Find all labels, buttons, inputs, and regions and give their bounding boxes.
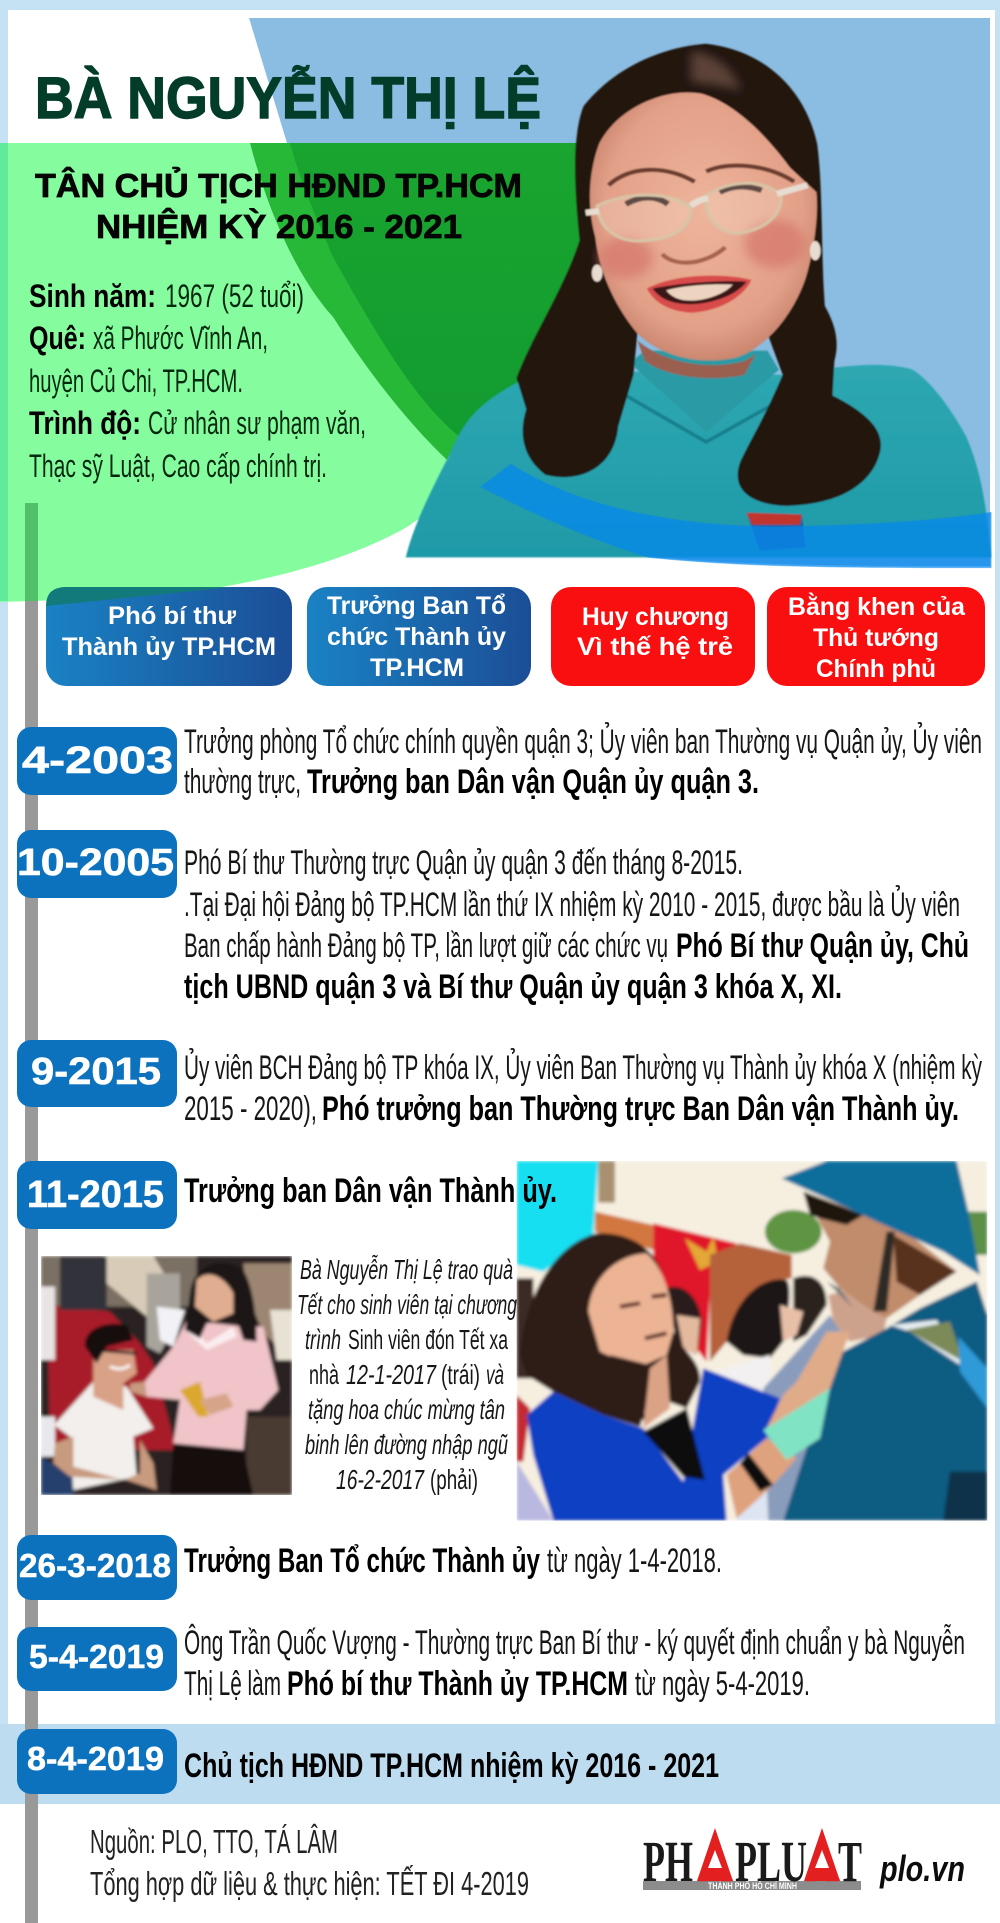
teeth xyxy=(666,284,733,301)
text block: personal information: Cử nhân sư phạm văn, xyxy=(148,405,366,441)
timeline entry: 8-4-2019: Chủ tịch HĐND TP.HCM nhiệm kỳ 2016 - 2021 xyxy=(184,1747,719,1785)
earrings xyxy=(592,241,821,282)
timeline entry: 8-4-2019 xyxy=(17,1729,719,1794)
timeline entry: 26-3-2018: từ ngày 1-4-2018. xyxy=(547,1542,722,1580)
text block: personal information xyxy=(29,278,366,484)
badge: Pho bi thu: Phó bí thư xyxy=(108,602,237,630)
glasses xyxy=(597,183,781,241)
logo: Phap Luat xyxy=(643,1828,862,1894)
hair xyxy=(517,44,881,506)
photo caption: và xyxy=(486,1359,504,1390)
blue wave xyxy=(480,464,991,568)
neck shadow xyxy=(637,340,756,378)
woman neck xyxy=(643,1355,670,1428)
timeline entry: 11-2015: 11-2015 xyxy=(27,1174,164,1216)
photo caption xyxy=(297,1254,517,1495)
photo: pinning badge on recruit xyxy=(517,1161,987,1521)
text block: personal information: Thạc sỹ Luật, Cao cấp chính trị. xyxy=(29,448,327,484)
panel: dark green xyxy=(290,143,595,470)
nose xyxy=(662,247,725,263)
logo: Phap Luat: A xyxy=(806,1829,840,1894)
text block: personal information: Trình độ: xyxy=(29,405,141,441)
badge: Truong Ban To chuc: Trưởng Ban Tổ xyxy=(327,592,506,620)
photo caption: tặng hoa chúc mừng tân xyxy=(308,1394,505,1425)
timeline entry: 11-2015: Trưởng ban Dân vận Thành ủy. xyxy=(184,1172,557,1210)
woman hair xyxy=(185,1263,257,1342)
arm xyxy=(727,1438,797,1518)
panel: bright green band xyxy=(250,143,462,460)
photo caption: (phải) xyxy=(430,1464,478,1495)
photo: gifts for students xyxy=(41,1256,292,1495)
badge: Huy chuong xyxy=(551,587,755,686)
photo caption: Bà Nguyễn Thị Lệ trao quà xyxy=(300,1254,513,1285)
collar edge xyxy=(626,395,783,442)
mouth xyxy=(647,276,751,313)
photo caption: (trái) xyxy=(441,1359,480,1390)
timeline entry: 4-2003: thường trực, xyxy=(184,763,301,801)
timeline entry: 5-4-2019: từ ngày 5-4-2019. xyxy=(635,1665,810,1703)
timeline entry: 8-4-2019: 8-4-2019 xyxy=(27,1740,164,1777)
badge: Bang khen: Bằng khen của xyxy=(788,591,966,621)
badge: Huy chuong: Vì thế hệ trẻ xyxy=(577,633,733,661)
woman features xyxy=(620,1295,667,1338)
glasses arm xyxy=(586,185,808,213)
badges xyxy=(46,587,985,686)
text block: personal information: xã Phước Vĩnh An, xyxy=(93,320,268,356)
portrait: Nguyen Thi Le xyxy=(406,44,991,568)
subtitle xyxy=(35,167,522,245)
text block: personal information: huyện Củ Chi, TP.HCM. xyxy=(29,363,243,399)
text block: personal information: Quê: xyxy=(29,320,86,356)
timeline bar xyxy=(25,503,38,1923)
neck collar xyxy=(630,351,779,432)
woman blouse xyxy=(143,1320,278,1450)
boy xyxy=(54,1382,153,1490)
helmet xyxy=(782,1161,980,1275)
photo caption: 12-1-2017 xyxy=(346,1359,437,1390)
logo text: plo.vn: plo.vn xyxy=(879,1848,965,1889)
panel: blue background xyxy=(249,18,990,566)
photo caption: trình xyxy=(305,1324,341,1355)
badge: Pho bi thu xyxy=(46,587,292,686)
jacket xyxy=(527,1368,780,1521)
source credits xyxy=(90,1823,529,1902)
timeline entry: 9-2015: 9-2015 xyxy=(31,1051,161,1093)
timeline entry: 26-3-2018: 26-3-2018 xyxy=(19,1547,171,1584)
timeline entry: 5-4-2019: 5-4-2019 xyxy=(29,1638,164,1675)
timeline entry: 4-2003 xyxy=(17,723,982,801)
logo: Phap Luat: PH xyxy=(643,1829,693,1894)
photo caption: binh lên đường nhập ngũ xyxy=(305,1429,508,1460)
timeline entry: 5-4-2019: Thị Lệ làm xyxy=(184,1665,281,1703)
eyebrows xyxy=(609,166,794,185)
badge: Pho bi thu: Thành ủy TP.HCM xyxy=(62,633,276,661)
badge: Bang khen: Thủ tướng xyxy=(813,624,939,652)
soldier face xyxy=(803,1192,957,1318)
woman hair xyxy=(520,1233,700,1427)
face xyxy=(590,92,817,361)
badge: Truong Ban To chuc xyxy=(307,587,531,686)
timeline entry: 4-2003: Trưởng ban Dân vận Quận ủy quận 3. xyxy=(307,763,759,801)
woman face xyxy=(588,1253,673,1368)
eyes xyxy=(626,187,762,204)
hair highlight xyxy=(691,51,741,92)
text block: personal information: 1967 (52 tuổi) xyxy=(165,278,304,314)
soldier uniform xyxy=(783,1282,987,1521)
photo caption: Tết cho sinh viên tại chương xyxy=(297,1289,517,1320)
source credits: Tổng hợp dữ liệu & thực hiện: TẾT ĐI 4-2019 xyxy=(90,1865,529,1902)
badge: Huy chuong: Huy chương xyxy=(582,603,729,631)
timeline entry: 26-3-2018 xyxy=(17,1535,722,1600)
badge: Truong Ban To chuc: chức Thành ủy xyxy=(327,623,506,651)
timeline entry: 4-2003: 4-2003 xyxy=(22,740,173,782)
subtitle: TÂN CHỦ TỊCH HĐND TP.HCM xyxy=(35,167,522,204)
timeline entry: 26-3-2018: Trưởng Ban Tổ chức Thành ủy xyxy=(184,1542,540,1580)
badge: Truong Ban To chuc: TP.HCM xyxy=(370,654,464,682)
photo caption: 16-2-2017 xyxy=(336,1464,425,1495)
timeline entry: 9-2015: 2015 - 2020), xyxy=(184,1090,317,1128)
woman hair side xyxy=(610,1355,650,1422)
mouth shadow xyxy=(653,281,746,304)
logo: Phap Luat: A xyxy=(697,1829,733,1894)
badge: Bang khen: Chính phủ xyxy=(816,655,936,683)
timeline entry: 5-4-2019: Phó bí thư Thành ủy TP.HCM xyxy=(287,1665,628,1703)
logo: Phap Luat: THÀNH PHỐ HỒ CHÍ MINH xyxy=(708,1880,797,1891)
subtitle: NHIỆM KỲ 2016 - 2021 xyxy=(96,208,462,245)
logo: Phap Luat: PLU xyxy=(735,1829,807,1894)
badge pin xyxy=(746,513,806,551)
cheeks xyxy=(599,220,806,278)
photo caption: nhà xyxy=(309,1359,339,1390)
dress xyxy=(406,365,991,558)
badge: Bang khen xyxy=(767,587,985,686)
photo caption: Sinh viên đón Tết xa xyxy=(348,1324,508,1355)
timeline entry: 5-4-2019 xyxy=(17,1624,965,1703)
timeline entry: 9-2015 xyxy=(17,1040,982,1128)
timeline entry: 11-2015 xyxy=(17,1161,557,1229)
title: BÀ NGUYỄN THỊ LỆ xyxy=(35,66,541,131)
woman face xyxy=(195,1274,233,1322)
panel: light green background xyxy=(0,143,472,602)
left strip green xyxy=(0,143,8,601)
timeline entry: 10-2005: Ban chấp hành Đảng bộ TP, lần lượt giữ các chức vụ xyxy=(184,927,668,965)
timeline entry: 10-2005 xyxy=(17,830,969,1006)
timeline entry: 10-2005: 10-2005 xyxy=(17,842,174,884)
logo: Phap Luat: T xyxy=(838,1829,862,1894)
text block: personal information: Sinh năm: xyxy=(29,278,156,314)
source credits: Nguồn: PLO, TTO, TÁ LÂM xyxy=(90,1823,338,1860)
